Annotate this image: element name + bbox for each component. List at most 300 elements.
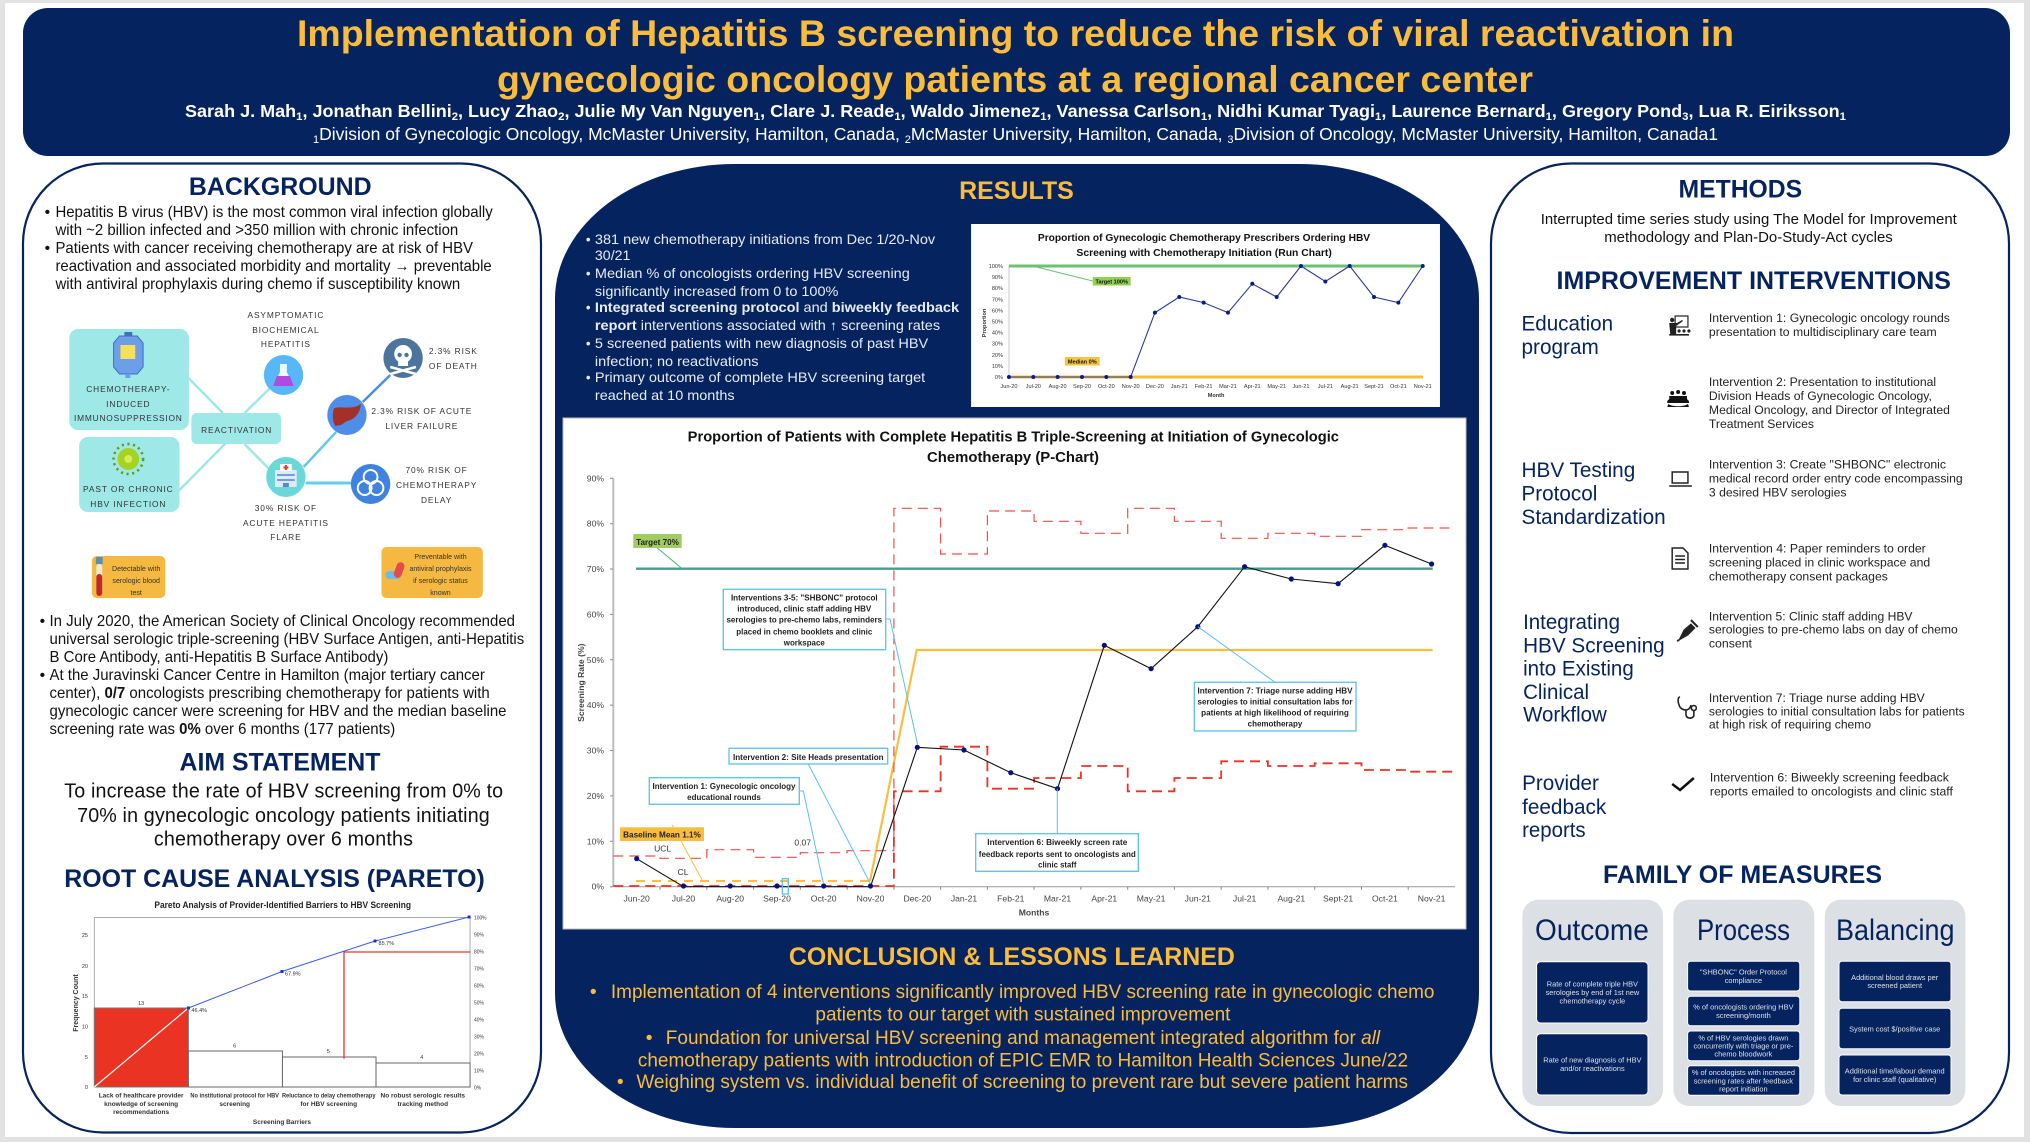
run chart axes: Apr-21 xyxy=(1244,384,1261,390)
results bullets: • xyxy=(586,336,591,351)
chart: run chart: Screening with Chemotherapy Initiation (Run Chart) xyxy=(1076,248,1332,259)
conclusion bullets: patients to our target with sustained improvement xyxy=(815,1004,1231,1026)
axes: 50% xyxy=(587,655,604,665)
icon: biohazard xyxy=(351,464,390,504)
results bullets: 5 screened patients with new diagnosis of past HBV xyxy=(595,336,928,351)
box: chemotherapy-induced immunosuppression: INDUCED xyxy=(106,399,150,409)
run chart axes: Jul-20 xyxy=(1026,384,1041,390)
conclusion bullets xyxy=(590,981,1435,1093)
label: asymptomatic biochemical hepatitis: HEPATITIS xyxy=(261,339,311,349)
measure box: screening rates after feedback xyxy=(1694,1076,1793,1085)
control limit labels xyxy=(654,838,811,877)
intervention 3: medical record order entry code encompassing xyxy=(1709,471,1963,486)
measure box: Additional time/labour demand xyxy=(1845,1067,1945,1076)
results bullets: • xyxy=(586,266,591,281)
axis labels: Reluctance to delay chemotherapy xyxy=(282,1092,376,1100)
heading: background: BACKGROUND xyxy=(189,174,372,201)
run chart axes: Feb-21 xyxy=(1195,384,1212,390)
axis labels: 85.7% xyxy=(379,941,394,947)
icon: pills xyxy=(385,561,406,579)
axis labels: Lack of healthcare provider xyxy=(99,1092,184,1100)
axes: 0% xyxy=(592,882,604,892)
affiliations: 2 xyxy=(905,134,911,146)
callout: intervention 7: Intervention 7: Triage nurse adding HBV xyxy=(1198,687,1353,696)
icon: stethoscope xyxy=(1678,697,1696,718)
mean line xyxy=(636,650,1433,881)
measure box: compliance xyxy=(1725,976,1762,985)
run chart axes: Sept-21 xyxy=(1364,384,1384,390)
axes: Feb-21 xyxy=(997,894,1025,904)
label: median 0% xyxy=(1065,357,1100,366)
control limit labels: UCL xyxy=(654,844,672,854)
icon: skull xyxy=(383,338,423,378)
measure box: Rate of new diagnosis of HBV xyxy=(1543,1056,1642,1065)
intervention 2: Treatment Services xyxy=(1709,417,1814,431)
callout: detectable with serologic blood test xyxy=(92,556,165,598)
label: target 100% xyxy=(1093,277,1131,286)
text block: screening recommendations: center), 0/7 oncologists prescribing chemotherapy for patients with xyxy=(50,685,490,702)
authors: 2 xyxy=(558,111,564,123)
results bullets: • xyxy=(586,232,591,247)
intervention 2 xyxy=(1709,375,1950,431)
methods and interventions content xyxy=(1522,176,1965,842)
icon: flask xyxy=(264,355,303,395)
axes: Jul-20 xyxy=(672,894,695,904)
callout: preventable with antiviral prophylaxis: antiviral prophylaxis xyxy=(409,565,472,573)
run chart axes: 20% xyxy=(992,353,1003,359)
label: target 70%: Target 70% xyxy=(636,538,680,547)
axis labels: for HBV screening xyxy=(300,1101,357,1108)
axis labels: 6 xyxy=(233,1043,236,1050)
axes: 20% xyxy=(587,791,604,801)
affiliations: 1 xyxy=(313,134,319,146)
run chart axes: Nov-21 xyxy=(1414,384,1432,390)
axes: Oct-21 xyxy=(1372,894,1398,904)
category: education program: program xyxy=(1522,336,1599,359)
intervention 4: chemotherapy consent packages xyxy=(1709,570,1888,584)
axes: Jul-21 xyxy=(1233,894,1257,904)
intervention 3: 3 desired HBV serologies xyxy=(1709,486,1847,500)
callout: preventable with antiviral prophylaxis: Preventable with xyxy=(414,553,467,561)
intervention 6 xyxy=(1710,771,1954,799)
run chart axes: 60% xyxy=(992,308,1003,314)
axes: Mar-21 xyxy=(1044,894,1071,904)
run chart axes: Proportion xyxy=(982,308,988,337)
category: integrating HBV screening: Integrating xyxy=(1523,611,1620,634)
diagram: HBV reactivation pathway xyxy=(69,310,483,598)
intervention 5 xyxy=(1709,609,1958,651)
axes: 90% xyxy=(587,473,604,483)
results bullets: • xyxy=(586,300,591,315)
card: balancing xyxy=(1825,900,1965,1106)
axes: May-21 xyxy=(1137,894,1166,904)
intervention 3 xyxy=(1709,457,1963,500)
label: acute liver failure xyxy=(371,406,472,431)
callout: interventions 3-5 xyxy=(723,589,886,650)
callout: intervention 1: Intervention 1: Gynecologic oncology xyxy=(652,782,796,791)
callout: intervention 2: Intervention 2: Site Heads presentation xyxy=(733,753,884,762)
results bullets: 30/21 xyxy=(595,248,630,263)
icon: checkmark xyxy=(1672,778,1694,790)
icon: presentation xyxy=(1669,316,1691,336)
callout: detectable with serologic blood test: test xyxy=(131,589,142,597)
callout: intervention 6 xyxy=(976,834,1138,871)
background bullets xyxy=(45,204,493,293)
aim statement text xyxy=(64,780,503,851)
title: Implementation of Hepatitis B screening to reduce the risk of viral reactivation in xyxy=(297,13,1734,54)
axis labels: 100% xyxy=(474,915,487,922)
conclusion bullets: chemotherapy patients with introduction of EPIC EMR to Hamilton Health Sciences June/22 xyxy=(638,1050,1408,1072)
axis labels: 67.9% xyxy=(285,971,301,978)
axis labels: 60% xyxy=(474,983,484,990)
background bullets: • xyxy=(45,240,50,257)
axis labels: 50% xyxy=(474,1000,484,1007)
axes: 70% xyxy=(587,564,604,574)
axis labels: 15 xyxy=(82,994,88,1000)
heading: methods: METHODS xyxy=(1678,176,1802,203)
axis labels: 20 xyxy=(82,964,88,970)
measure box: and/or reactivations xyxy=(1560,1064,1625,1073)
card: balancing: Balancing xyxy=(1836,914,1954,947)
intervention 2: Division Heads of Gynecologic Oncology, xyxy=(1709,389,1932,403)
axis labels: 0 xyxy=(85,1085,88,1091)
axis labels: 40% xyxy=(474,1017,484,1024)
authors: 1 xyxy=(1040,111,1047,123)
run chart axes: Dec-20 xyxy=(1146,384,1164,390)
authors: 1 xyxy=(1201,111,1207,123)
chart: pareto xyxy=(73,900,487,1126)
panel: left column xyxy=(23,164,541,1132)
axis labels: Frequency Count xyxy=(73,974,80,1032)
label: chemotherapy delay xyxy=(396,465,477,505)
measure box xyxy=(1537,962,1648,1023)
intervention 3: Intervention 3: Create "SHBONC" electronic xyxy=(1709,457,1946,471)
chart: P-chart: Proportion of Patients with Complete Hepatitis B Triple-Screening at Initiation of Gynecologic xyxy=(688,430,1339,446)
title xyxy=(297,13,1734,100)
callout: intervention 7: chemotherapy xyxy=(1248,720,1303,729)
callout: preventable with antiviral prophylaxis xyxy=(381,547,483,598)
target line xyxy=(636,568,1433,570)
intervention 6: reports emailed to oncologists and clinic staff xyxy=(1710,785,1954,799)
affiliations: 3 xyxy=(1227,134,1234,146)
run chart axes: 30% xyxy=(992,342,1003,348)
text block: screening recommendations: At the Juravinski Cancer Centre in Hamilton (major tertiary cancer xyxy=(50,667,485,684)
measure box: report initiation xyxy=(1719,1084,1768,1093)
axes: 60% xyxy=(587,609,604,619)
label: 30% risk of acute hepatitis flare: FLARE xyxy=(270,532,302,542)
axes: 30% xyxy=(587,746,604,756)
axis labels: knowledge of screening xyxy=(104,1101,178,1108)
axes: Months xyxy=(1019,908,1049,918)
measure box xyxy=(1688,961,1800,991)
box: past or chronic HBV infection: HBV INFECTION xyxy=(90,499,166,509)
run chart axes: May-21 xyxy=(1267,384,1286,390)
intervention 2: Medical Oncology, and Director of Integrated xyxy=(1709,403,1950,417)
intervention 1 xyxy=(1709,311,1950,339)
conclusion bullets: • xyxy=(646,1027,653,1049)
intervention 6: Intervention 6: Biweekly screening feedback xyxy=(1710,771,1949,785)
label: 30% risk of acute hepatitis flare: ACUTE HEPATITIS xyxy=(243,518,329,528)
axis labels: tracking method xyxy=(398,1101,448,1108)
chart: P-chart: Chemotherapy (P-Chart) xyxy=(927,450,1099,466)
text block: screening recommendations: • xyxy=(40,613,45,630)
aim statement text: To increase the rate of HBV screening from 0% to xyxy=(64,780,503,803)
authors: , Waldo Jimenez xyxy=(901,101,1040,121)
callout: interventions 3-5: serologies to pre-chemo labs, reminders xyxy=(726,616,883,625)
text block: screening recommendations: universal serologic triple-screening (HBV Surface Antigen, anti-Hepatitis xyxy=(50,631,524,648)
title: gynecologic oncology patients at a regional cancer center xyxy=(497,59,1533,100)
icon: liver xyxy=(327,395,367,435)
axis labels: screening xyxy=(219,1101,250,1108)
axis labels: 25 xyxy=(82,933,88,939)
authors: 1 xyxy=(754,111,760,123)
affiliations: Division of Gynecologic Oncology, McMaster University, Hamilton, Canada, xyxy=(319,124,905,144)
category: HBV testing protocol standardization: HBV Testing xyxy=(1522,459,1635,482)
callout: intervention 6: feedback reports sent to oncologists and xyxy=(979,850,1136,859)
measure box: chemo bloodwork xyxy=(1714,1050,1773,1059)
callout: interventions 3-5: placed in chemo booklets and clinic xyxy=(736,628,873,637)
callout: intervention 6: Intervention 6: Biweekly screen rate xyxy=(987,838,1128,847)
label: baseline mean: Baseline Mean 1.1% xyxy=(623,831,702,840)
aim statement text: 70% in gynecologic oncology patients initiating xyxy=(77,805,490,827)
panel: center column xyxy=(555,164,1479,1128)
text block: screening recommendations: screening rate was 0% over 6 months (177 patients) xyxy=(50,721,395,738)
intervention 5: consent xyxy=(1709,637,1753,651)
run chart series xyxy=(1007,264,1425,379)
heading: results: RESULTS xyxy=(959,177,1074,205)
box: chemotherapy-induced immunosuppression xyxy=(69,329,189,430)
panel: right column xyxy=(1491,164,2009,1133)
card: process: Process xyxy=(1697,914,1790,947)
run chart axes: Jan-21 xyxy=(1171,384,1188,390)
authors: , Julie My Van Nguyen xyxy=(564,101,754,121)
results bullets: infection; no reactivations xyxy=(595,354,759,369)
axis labels: 10% xyxy=(474,1068,484,1075)
chart: P-chart xyxy=(563,418,1466,929)
axis labels xyxy=(73,915,487,1126)
callout: intervention 7: serologies to initial consultation labs for xyxy=(1198,698,1353,707)
run chart axes: 0% xyxy=(995,375,1003,381)
card: process xyxy=(1673,900,1814,1106)
upper control limit xyxy=(613,508,1455,858)
axes: Nov-20 xyxy=(857,894,885,904)
conclusion bullets: Implementation of 4 interventions significantly improved HBV screening rate in gynecologic chemo xyxy=(611,981,1435,1003)
measure box xyxy=(1688,1031,1800,1061)
axes: Sep-20 xyxy=(763,894,791,904)
label: asymptomatic biochemical hepatitis: BIOCHEMICAL xyxy=(252,325,320,335)
callout: intervention 1 xyxy=(649,778,799,804)
authors: 1 xyxy=(296,111,303,123)
axes: Apr-21 xyxy=(1091,894,1117,904)
box: chemotherapy-induced immunosuppression: IMMUNOSUPPRESSION xyxy=(74,413,183,423)
callout: intervention 6: clinic staff xyxy=(1038,861,1077,870)
label: baseline mean xyxy=(620,827,704,841)
axes: Sept-21 xyxy=(1323,894,1353,904)
authors: , Vanessa Carlson xyxy=(1047,101,1201,121)
icon: meeting xyxy=(1667,390,1689,407)
axis labels: 80% xyxy=(474,949,484,956)
icon: syringe xyxy=(1677,620,1698,641)
axes: Nov-21 xyxy=(1418,894,1446,904)
control limit labels: CL xyxy=(678,867,689,877)
measure box xyxy=(1688,996,1800,1026)
label: 30% risk of acute hepatitis flare: 30% RISK OF xyxy=(255,503,317,513)
run chart axes: 70% xyxy=(992,297,1003,303)
intervention 7: at high risk of requiring chemo xyxy=(1709,718,1872,732)
results bullets: reached at 10 months xyxy=(595,388,735,403)
callout: intervention 7 xyxy=(1194,682,1356,731)
background bullets: • xyxy=(45,204,50,221)
measure box xyxy=(1839,1055,1951,1095)
authors: 3 xyxy=(1682,111,1688,123)
authors: , Lucy Zhao xyxy=(458,101,558,121)
run chart axes: Jun-20 xyxy=(1000,384,1017,390)
conclusion bullets: • xyxy=(590,981,597,1003)
axis labels: 4 xyxy=(420,1055,423,1061)
run chart axes: Jul-21 xyxy=(1318,384,1333,390)
background bullets: with antiviral prophylaxis during chemo if susceptibility known xyxy=(55,276,460,293)
measure box xyxy=(1537,1034,1648,1095)
heading: root cause analysis: ROOT CAUSE ANALYSIS (PARETO) xyxy=(64,866,485,893)
lower control limit xyxy=(613,747,1455,886)
callout: interventions 3-5: Interventions 3-5: "SHBONC" protocol xyxy=(731,594,878,603)
category: HBV testing protocol standardization: Protocol xyxy=(1522,482,1597,506)
axes: Jan-21 xyxy=(951,894,977,904)
measure box: Additional blood draws per xyxy=(1851,973,1939,982)
conclusion bullets: • xyxy=(617,1071,624,1093)
axes xyxy=(576,473,1455,918)
axes: Jun-21 xyxy=(1185,894,1211,904)
axes: Oct-20 xyxy=(811,894,837,904)
callout: preventable with antiviral prophylaxis: if serologic status xyxy=(413,577,468,585)
conclusion bullets: Weighing system vs. individual benefit of screening to prevent rare but severe patient harms xyxy=(636,1071,1408,1093)
intervention 4 xyxy=(1709,541,1930,584)
icon: blood tube xyxy=(96,557,103,596)
label: asymptomatic biochemical hepatitis: ASYMPTOMATIC xyxy=(248,310,324,320)
chart: run chart: Proportion of Gynecologic Chemotherapy Prescribers Ordering HBV xyxy=(1038,233,1370,244)
label: target 70% xyxy=(633,534,682,548)
heading: family of measures: FAMILY OF MEASURES xyxy=(1603,861,1882,889)
intervention 1: Intervention 1: Gynecologic oncology rounds xyxy=(1709,311,1950,325)
label: 30% risk of acute hepatitis flare xyxy=(243,503,329,542)
category: HBV testing protocol standardization: Standardization xyxy=(1522,506,1666,529)
authors: 1 xyxy=(1546,111,1552,123)
threshold lines xyxy=(344,952,470,1059)
intervention 5: serologies to pre-chemo labs on day of chemo xyxy=(1709,623,1958,637)
measure box: serologies by end of 1st new xyxy=(1546,988,1640,997)
axis labels: 90% xyxy=(474,932,484,939)
label: risk of death: 2.3% RISK xyxy=(429,346,478,356)
icon: hospital xyxy=(266,457,306,497)
label: risk of death: OF DEATH xyxy=(429,361,478,371)
callout: interventions 3-5: introduced, clinic staff adding HBV xyxy=(737,605,872,614)
background bullets: reactivation and associated morbidity and mortality → preventable xyxy=(55,258,492,275)
aim statement text: chemotherapy over 6 months xyxy=(154,828,413,851)
background bullets: Hepatitis B virus (HBV) is the most common viral infection globally xyxy=(55,204,493,221)
axis labels: 30% xyxy=(474,1034,484,1041)
authors: , Nidhi Kumar Tyagi xyxy=(1207,101,1375,121)
axis labels: 20% xyxy=(474,1051,484,1058)
box: chemotherapy-induced immunosuppression: CHEMOTHERAPY- xyxy=(86,384,170,394)
text block: screening recommendations: B Core Antibody, anti-Hepatitis B Surface Antibody) xyxy=(50,649,388,666)
measure box xyxy=(1839,961,1951,1002)
run chart axes: Oct-21 xyxy=(1390,384,1407,390)
chart: run chart xyxy=(971,224,1440,407)
authors: 2 xyxy=(452,111,458,123)
callout: intervention 2 xyxy=(729,748,888,764)
conclusion section xyxy=(590,943,1435,1093)
run chart axes: Mar-21 xyxy=(1219,384,1237,390)
authors: 1 xyxy=(894,111,901,123)
axis labels: 70% xyxy=(474,966,484,973)
conclusion bullets: Foundation for universal HBV screening and management integrated algorithm for all xyxy=(666,1027,1381,1049)
results bullets: Integrated screening protocol and biweekly feedback xyxy=(595,300,960,315)
category: integrating HBV screening: Clinical xyxy=(1523,681,1589,704)
axis labels: recommendations xyxy=(113,1109,169,1116)
results bullets: Median % of oncologists ordering HBV screening xyxy=(595,266,910,281)
run chart axes: Nov-20 xyxy=(1122,384,1140,390)
intervention 5: Intervention 5: Clinic staff adding HBV xyxy=(1709,609,1913,623)
authors: , Jonathan Bellini xyxy=(303,101,452,121)
callout: intervention 7: patients at high likelihood of requiring xyxy=(1201,709,1349,718)
run chart axes: 10% xyxy=(992,364,1003,370)
intervention 7: serologies to initial consultation labs for patients xyxy=(1709,704,1965,719)
category: education program xyxy=(1522,312,1613,359)
left column content xyxy=(40,174,524,1126)
icon: laptop xyxy=(1669,472,1692,486)
axes: 10% xyxy=(587,836,604,846)
results bullets: 381 new chemotherapy initiations from Dec 1/20-Nov xyxy=(595,232,935,247)
icon: document xyxy=(1672,548,1688,569)
run chart axes: Month xyxy=(1208,393,1225,399)
callout: detectable with serologic blood test: Detectable with xyxy=(112,565,160,573)
run chart axes: 100% xyxy=(989,264,1003,270)
authors: Sarah J. Mah xyxy=(185,101,293,121)
measure box: screened patient xyxy=(1867,981,1922,990)
methods text: methodology and Plan-Do-Study-Act cycles xyxy=(1604,230,1893,246)
screening rate series xyxy=(634,543,1434,889)
measure box: "SHBONC" Order Protocol xyxy=(1700,968,1787,977)
run chart axes: 40% xyxy=(992,331,1003,337)
heading: aim statement: AIM STATEMENT xyxy=(180,749,380,777)
authors: , Gregory Pond xyxy=(1552,101,1682,121)
axes: Screening Rate (%) xyxy=(576,643,586,722)
axis labels: 46.4% xyxy=(191,1008,207,1014)
leader lines xyxy=(782,619,1275,894)
label: chemotherapy delay: 70% RISK OF xyxy=(405,465,468,475)
text block: screening recommendations xyxy=(40,613,524,738)
affiliations: McMaster University, Hamilton, Canada, xyxy=(911,124,1227,144)
authors: , Laurence Bernard xyxy=(1381,101,1546,121)
intervention 7 xyxy=(1709,691,1965,732)
measure box: Rate of complete triple HBV xyxy=(1547,980,1638,989)
text block: screening recommendations: • xyxy=(40,667,45,684)
authors: 1 xyxy=(1840,111,1846,123)
category: integrating HBV screening xyxy=(1523,611,1665,727)
category: integrating HBV screening: Workflow xyxy=(1523,704,1608,727)
box: past or chronic HBV infection: PAST OR CHRONIC xyxy=(83,484,174,494)
category: provider feedback reports: Provider xyxy=(1522,772,1599,795)
background bullets: Patients with cancer receiving chemotherapy are at risk of HBV xyxy=(55,240,473,257)
run chart axes: Oct-20 xyxy=(1098,384,1115,390)
measure box: % of HBV serologies drawn xyxy=(1698,1033,1788,1042)
axis labels: Screening Barriers xyxy=(253,1119,311,1126)
category: integrating HBV screening: HBV Screening xyxy=(1523,634,1665,658)
callout: interventions 3-5: workspace xyxy=(783,639,825,648)
icon: IV bag xyxy=(114,332,143,378)
axis labels: 5 xyxy=(327,1049,330,1055)
label: acute liver failure: 2.3% RISK OF ACUTE xyxy=(371,406,472,416)
